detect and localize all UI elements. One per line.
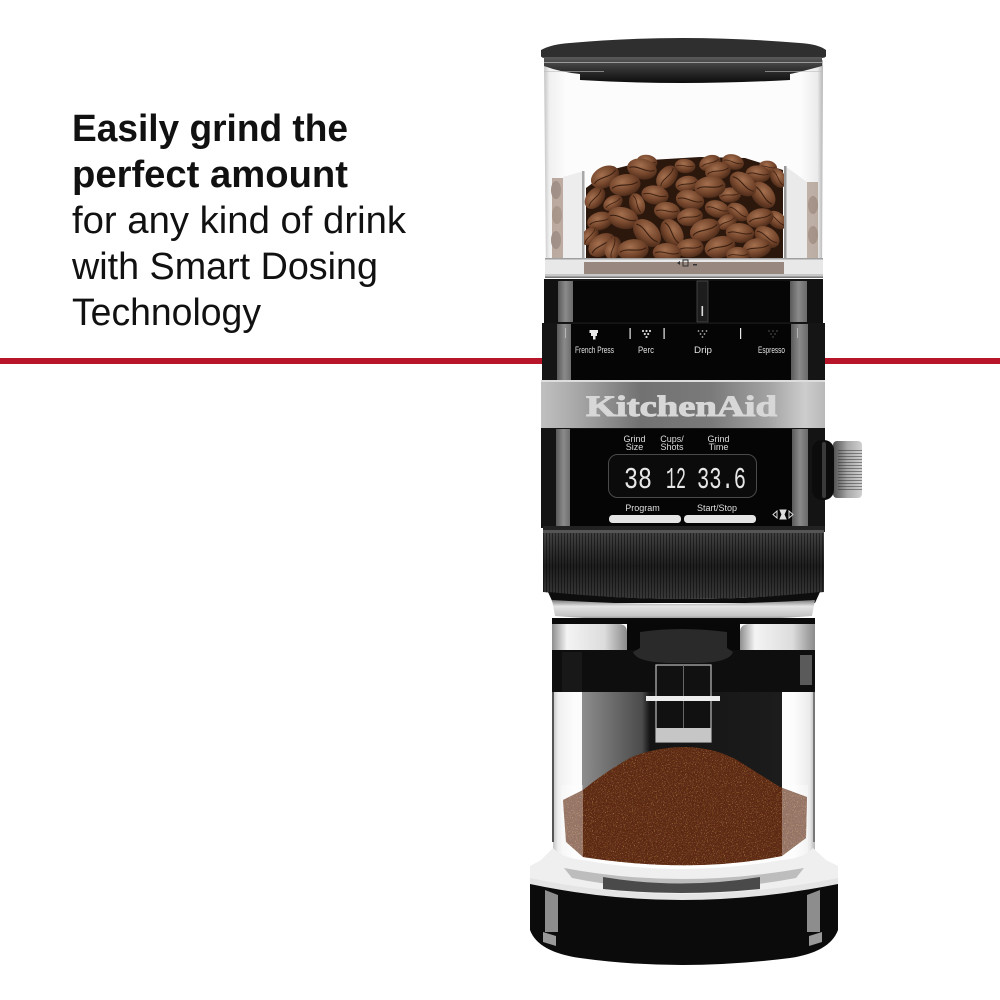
program and start/stop buttons: Program <box>625 503 660 513</box>
grind setting labels <box>575 345 785 356</box>
display labels: Grind <box>623 434 646 444</box>
display labels: Time <box>709 442 728 452</box>
side beans seen through the glass <box>551 178 818 258</box>
black upper collection band <box>552 650 815 693</box>
grind setting labels: French Press <box>575 345 614 356</box>
display labels: Shots <box>660 442 684 452</box>
program and start/stop buttons: Start/Stop <box>697 503 737 513</box>
control panel <box>541 428 825 528</box>
heading text block: Easily grind the <box>72 108 348 150</box>
digital display: 12 <box>666 463 686 498</box>
heading text block: Technology <box>72 292 261 334</box>
grind setting labels: Drip <box>694 345 712 356</box>
chrome shoulders <box>552 620 815 660</box>
grind setting labels: Perc <box>638 345 654 356</box>
lid <box>541 38 826 83</box>
ground coffee pile <box>563 747 807 865</box>
heading text block: with Smart Dosing <box>71 246 378 288</box>
display labels: Cups/ <box>660 434 684 444</box>
glass base ring <box>530 848 838 901</box>
red divider line <box>0 358 1000 364</box>
coffee grinder <box>530 38 862 965</box>
heading text block: for any kind of drink <box>72 200 407 242</box>
heading text block <box>71 108 407 334</box>
side dial knob <box>812 440 862 500</box>
hourglass and arrows icon <box>773 510 793 519</box>
program and start/stop buttons <box>609 503 756 523</box>
upper black body <box>544 279 823 323</box>
display labels: Grind <box>707 434 730 444</box>
stainless band with KitchenAid logo: KitchenAid <box>586 390 777 423</box>
stainless band with KitchenAid logo <box>541 380 825 428</box>
grounds container <box>552 665 815 865</box>
dispensing spout <box>633 629 733 663</box>
digital display: 38 <box>624 463 652 498</box>
digital display: 33.6 <box>697 463 746 498</box>
hopper inner walls <box>563 166 807 258</box>
coffee beans <box>584 154 784 258</box>
glass side haze <box>561 785 808 860</box>
black base <box>530 884 838 965</box>
hopper collar with lock icon <box>545 258 823 278</box>
chrome collar <box>552 600 815 624</box>
grind selector panel <box>542 323 825 381</box>
heading text block: perfect amount <box>72 154 348 196</box>
digital display <box>608 454 756 498</box>
display labels <box>623 434 730 452</box>
grind setting labels: Espresso <box>758 345 785 356</box>
clear chute <box>646 665 720 742</box>
grind setting icons <box>565 328 798 340</box>
ribbed adjustment ring <box>543 526 825 603</box>
bean hopper <box>541 38 826 278</box>
display labels: Size <box>626 442 643 452</box>
